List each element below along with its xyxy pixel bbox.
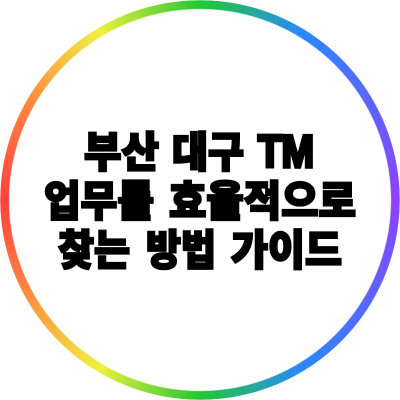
title line 2 [44,168,356,229]
title line 3: 방법 [146,217,216,278]
title line 1: 대구 [172,119,244,180]
title line 1: TM [258,126,314,177]
title line 3 [58,217,342,278]
title line 1 [84,119,314,180]
title line 2: 업무를 [44,168,154,229]
title line 2: 효율적으로 [169,168,356,229]
title line 1: 부산 [84,119,159,180]
title line 3: 찾는 [58,217,130,278]
title line 3: 가이드 [231,217,342,278]
